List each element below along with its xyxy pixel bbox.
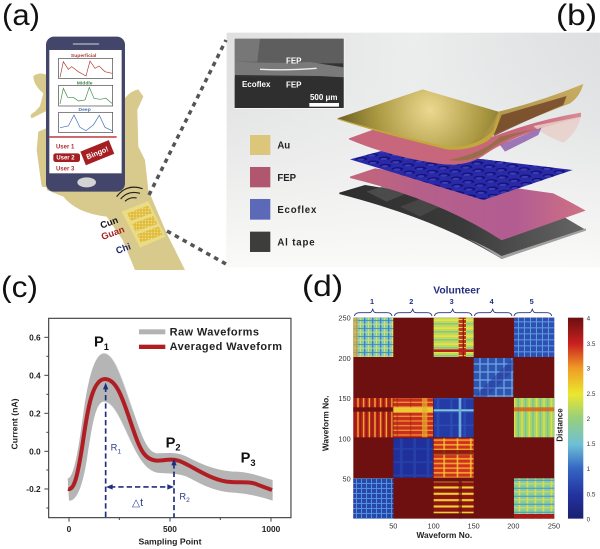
x axis tick labels: 150 [468,522,480,531]
legend [139,327,282,353]
layer: Au [337,84,583,150]
connector: dashed line to top of panel b [149,40,226,195]
colour bar labels: 2 [587,416,591,423]
legend: Averaged Waveform [170,341,282,353]
volunteer numbers: 5 [530,297,534,306]
x axis title: Sampling Point [138,537,202,547]
label (d): (d) [302,270,343,303]
colour bar [568,318,583,519]
annotation labels: R [111,443,117,453]
volunteer numbers [370,297,534,306]
peak labels: P [166,435,175,451]
panel d: distance heatmap [321,286,596,540]
pulse position labels: Cun [99,215,120,231]
x axis tick labels: 50 [389,522,397,531]
peak labels [94,335,256,468]
heatmap [353,318,554,519]
label (c): (c) [1,271,38,304]
colour bar labels: 1.5 [587,441,596,448]
layer: upper FEP [349,113,581,165]
sensor patch on wrist [122,201,166,248]
legend [250,135,317,252]
pulse position labels [99,215,132,256]
pulse position labels: Chi [115,241,132,256]
peak labels: P [94,335,104,351]
x axis tick labels: 100 [428,522,440,531]
icon: smartphone [46,37,125,192]
colour bar labels: 2.5 [587,391,596,398]
annotation labels: 2 [186,497,190,504]
peak labels: 3 [250,458,256,468]
y axis tick labels: 0.4 [29,370,41,380]
legend: Raw Waveforms [170,327,259,339]
volunteer numbers: 1 [370,297,374,306]
y axis tick labels: 200 [338,354,351,363]
volunteer numbers: 2 [409,297,413,306]
x axis tick labels: 200 [507,522,519,531]
y axis tick labels: 100 [338,434,351,443]
annotation labels: R [179,491,186,501]
colour bar labels [587,315,596,523]
chart: deep [59,107,113,133]
chart: superficial: Superficial [71,53,97,59]
chart: superficial [59,53,113,79]
y axis tick labels [26,332,41,494]
axis ticks [44,337,271,522]
legend: Ecoflex [277,205,317,216]
inset: SEM micrograph: FEP [286,81,302,90]
volunteer numbers: 3 [450,297,454,306]
callout: bingo: Bingo! [85,144,110,161]
volunteer numbers: 4 [490,297,495,306]
volunteer brackets [354,309,552,316]
raw waveforms band [68,353,273,501]
volunteer title: Volunteer [433,286,480,297]
colour bar labels: 0 [587,516,591,523]
panel b: device background [227,33,600,267]
x axis tick labels [389,522,560,531]
panel a: hand holding phone [31,37,185,270]
user list [53,144,80,172]
annotation labels: △t [132,497,143,509]
layer: Al tape [339,185,586,259]
axes frame [49,318,291,518]
layer: lower FEP [350,168,586,240]
callout: bingo [80,140,114,165]
colour bar labels: 1 [587,466,591,473]
colour bar labels: 3.5 [587,341,596,348]
legend: FEP [277,173,297,184]
x axis tick labels: 0 [67,524,72,534]
peak labels: P [241,451,250,467]
layer: Ecoflex [350,148,573,200]
y axis tick labels: 150 [338,394,351,403]
user list: User 1 [56,144,75,150]
peak labels: 1 [104,342,109,352]
averaged waveform [68,379,272,490]
y axis tick labels: -0.2 [26,484,41,494]
icon: hand and wrist [31,74,185,270]
user list: User 2 [56,156,75,162]
icon: wireless signal [117,187,143,201]
x axis tick labels: 1000 [262,524,281,534]
connector: dashed line to bottom of panel b [167,231,226,264]
user list: User 3 [56,166,75,172]
x axis title: Waveform No. [416,530,472,540]
chart: middle [59,80,113,106]
inset: SEM micrograph: FEP [286,56,302,65]
pulse position labels: Guan [100,224,126,242]
chart: middle: Middle [77,80,93,86]
y axis tick labels [338,314,351,483]
colour bar title: Distance [556,408,565,442]
x axis tick labels: 500 [163,524,177,534]
chart: deep: Deep [79,107,91,113]
x axis tick labels [67,524,281,534]
colour bar labels: 0.5 [587,491,596,498]
annotation labels [111,443,190,509]
inset: SEM micrograph: 500 μm [310,93,338,102]
y axis title: Waveform No. [321,395,331,451]
y axis title: Current (nA) [10,398,20,449]
legend: Al tape [277,238,315,249]
annotation arrows [103,383,177,518]
colour bar labels: 3 [587,366,591,373]
peak labels: 2 [175,443,181,453]
colour bar labels: 4 [587,315,591,322]
panel c: waveform chart [10,318,291,547]
inset: SEM micrograph: Ecoflex [242,80,271,89]
y axis tick labels: 50 [343,474,351,483]
y axis tick labels: 0.0 [29,446,41,456]
annotation labels: 1 [117,448,121,455]
legend: Au [277,141,290,152]
x axis tick labels: 250 [548,522,560,531]
inset: SEM micrograph [234,38,344,109]
y axis tick labels: 0.6 [29,332,41,342]
y axis tick labels: 250 [338,314,351,323]
y axis tick labels: 0.2 [29,408,41,418]
